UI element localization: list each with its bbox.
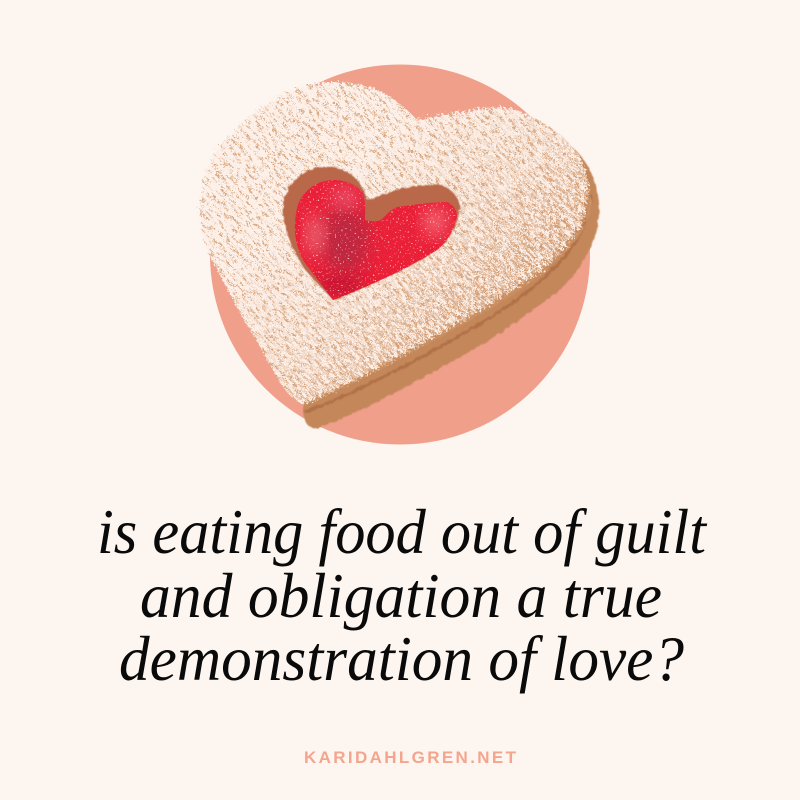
heading line 2: and obligation a true [140, 561, 662, 631]
red jam heart [294, 180, 457, 300]
cookie top edge [300, 190, 592, 405]
sugar speckles [195, 75, 595, 415]
website footer: KARIDAHLGREN.NET [304, 748, 517, 767]
illustration: heart-shaped linzer cookie [195, 75, 599, 428]
powdered sugar top [195, 75, 595, 415]
heading line 1: is eating food out of guilt [97, 497, 707, 567]
heading question [97, 497, 707, 694]
jam shading [321, 206, 369, 274]
heading line 3: demonstration of love? [119, 624, 684, 694]
cookie bottom layer side [303, 148, 599, 428]
salmon circle behind cookie [210, 64, 590, 444]
cookie layer seam [305, 195, 591, 412]
brown heart cut-out [283, 167, 460, 300]
